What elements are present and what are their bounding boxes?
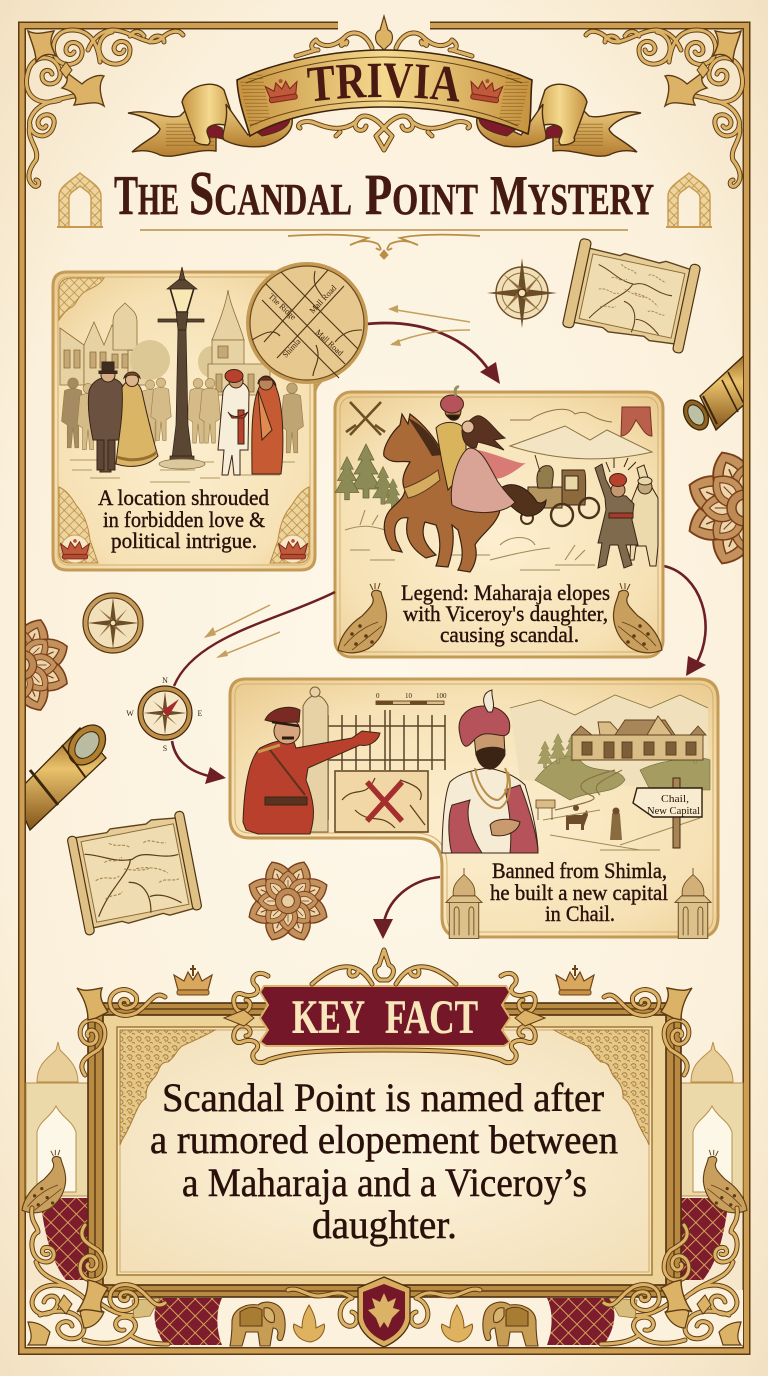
flow arrow 2 to 3 via compass: [172, 592, 335, 784]
band background: [26, 1290, 743, 1345]
filigree arch right: [554, 1030, 649, 1145]
top crest: [312, 950, 456, 984]
key fact text: Scandal Point is named after: [162, 1075, 604, 1120]
panel 2 background: [335, 392, 663, 657]
icon: left arch: [57, 173, 103, 227]
colonial buildings: [60, 303, 150, 385]
lotus left: [293, 1305, 325, 1342]
street map inset: Mall Road: [314, 327, 346, 358]
dome right: [675, 868, 711, 938]
icon: crown left: [61, 535, 89, 563]
filigree arch left: [120, 1030, 215, 1145]
panel 3 caption: Banned from Shimla,: [492, 858, 667, 883]
red-crossed map: [335, 771, 428, 832]
icon: right arch: [666, 173, 712, 227]
panel 1 caption: political intrigue.: [111, 528, 257, 553]
hands: [490, 819, 520, 836]
icon: crown right of key fact: [556, 965, 594, 995]
panel 2: the legend: [335, 387, 663, 657]
key fact banner: [224, 950, 545, 1063]
corner scroll bottom left: [77, 1225, 165, 1312]
title: [114, 160, 654, 228]
title: THE: [114, 165, 179, 227]
icon: right crown: [468, 77, 504, 103]
banner ribbon: TRIVIA: [128, 49, 642, 157]
icon: crown left of key fact: [174, 965, 212, 995]
plume: [484, 690, 494, 712]
key fact text: a Maharaja and a Viceroy’s: [182, 1160, 587, 1205]
pine trees: [335, 444, 401, 508]
telescope right: [682, 356, 743, 432]
panel 2 inner line: [340, 397, 658, 652]
face and beard: [474, 731, 505, 765]
banner scrolls: [224, 973, 545, 1063]
necklaces: [471, 768, 510, 808]
carriage: [521, 455, 599, 526]
ribbon end hatching: [240, 73, 529, 128]
iron gate: [303, 687, 445, 832]
panel edge curve toward street map: [315, 376, 330, 392]
flow arrow 3 to key fact: [373, 877, 440, 939]
panel 3 background: [230, 679, 718, 937]
panel 1 caption: [98, 485, 269, 553]
panel 2 caption: with Viceroy's daughter,: [403, 601, 608, 626]
scarf: [478, 450, 526, 479]
elephant left: [230, 1302, 285, 1346]
robe: [442, 768, 538, 853]
lotus right: [441, 1305, 473, 1342]
scale bar: [376, 692, 447, 704]
key fact text: [150, 1075, 618, 1247]
street map inset: Shimla: [280, 336, 303, 359]
signpost: [633, 778, 702, 848]
scale bar: 10: [405, 692, 412, 700]
title: MYSTERY: [490, 165, 654, 227]
turban: [459, 706, 510, 746]
compass with cardinal points: E: [198, 709, 203, 718]
shield emblem: [288, 1277, 480, 1347]
red lattice: [40, 1198, 90, 1280]
ornament: scroll under banner: [298, 116, 470, 150]
banner label: KEY: [292, 991, 365, 1044]
arcade: [26, 1083, 90, 1196]
ribbon left tail: [128, 84, 292, 156]
treasure map top right: [562, 238, 701, 354]
officer in red: [243, 707, 380, 834]
palace and peacock side scene: left: [22, 1042, 90, 1280]
compass with cardinal points: W: [126, 709, 134, 718]
lady: [116, 372, 158, 466]
ground dust and bushes: [345, 510, 595, 570]
banner plate: [260, 986, 510, 1046]
title divider ornament: [140, 230, 628, 259]
center mandala: [244, 857, 332, 945]
winding road: [555, 770, 622, 810]
horse and figure on road: [566, 805, 622, 840]
mane: [408, 418, 442, 456]
background crowd: [62, 378, 303, 453]
gentleman: [88, 362, 125, 472]
street map inset: The Ridge: [267, 291, 298, 322]
lattice corners: [59, 278, 309, 563]
ribbon inner lines: [246, 57, 522, 126]
field lines: [543, 810, 700, 850]
Maharaja portrait: [442, 690, 538, 853]
arcade: [679, 1083, 743, 1196]
ornament: top crest above banner: [296, 16, 472, 56]
forest and gardens: [535, 734, 710, 800]
Maharaja rider: [436, 387, 466, 490]
banner text: TRIVIA: [306, 63, 460, 102]
dome: [37, 1042, 78, 1082]
hills: [510, 695, 708, 790]
panel 2 caption: causing scandal.: [440, 622, 579, 647]
harness: [404, 470, 440, 498]
compass with cardinal points: S: [163, 744, 167, 753]
arch opening: [693, 1106, 732, 1192]
palace of Chail: [572, 716, 706, 760]
couple: gentleman and lady: [88, 362, 158, 472]
bottom decorative band: [26, 1208, 743, 1346]
signpost: New Capital: [647, 805, 700, 817]
corner scroll top left: [77, 988, 165, 1075]
compass with cardinal points: N: [162, 676, 168, 685]
key fact body: [117, 1027, 652, 1275]
panel 1 caption: A location shrouded: [98, 485, 269, 510]
panel 3 inner line: [235, 684, 713, 932]
horse tail: [498, 485, 546, 516]
palace and peacock side scene: right: [679, 1042, 747, 1280]
icon: right peacock: [613, 583, 662, 653]
street lamp: [158, 267, 205, 469]
panel 1 caption: in forbidden love &: [103, 507, 265, 532]
key fact panel: [77, 950, 692, 1347]
compass rose top right: [487, 258, 557, 328]
elephant right: [483, 1302, 538, 1346]
telescope left: [26, 724, 107, 832]
ribbon main band: [237, 50, 532, 136]
banner label: [292, 991, 478, 1044]
trees behind: [130, 340, 226, 380]
street map inset: [246, 262, 368, 384]
corner scroll top right: [604, 988, 692, 1075]
icon: red tent: [621, 407, 652, 436]
banner label: FACT: [385, 991, 478, 1044]
street map inset: Mall Road: [307, 282, 339, 315]
scale bar: 100: [436, 692, 447, 700]
compass with cardinal points: [126, 676, 203, 753]
horse: [384, 414, 501, 572]
small roadside hut: [536, 800, 555, 820]
right bottom scrolls: [601, 1208, 741, 1345]
panel 3 caption: he built a new capital: [490, 880, 668, 905]
scale bar: 0: [376, 692, 380, 700]
frame band line: [95, 1009, 674, 1291]
red lattice: [679, 1198, 729, 1280]
signpost: Chail,: [661, 793, 689, 805]
mountains: [510, 409, 652, 459]
red lattice left: [155, 1298, 222, 1345]
ribbon right tail: [477, 84, 641, 156]
angry men: [595, 458, 658, 568]
panel 3: banished to Chail: [230, 679, 718, 938]
small compass left: [83, 593, 143, 653]
treasure map left: [66, 811, 203, 935]
left mandala decoration: [26, 619, 68, 711]
man in white: [218, 370, 249, 475]
icon: crossed swords: [346, 402, 385, 435]
title: SCANDAL: [189, 160, 352, 228]
panel 3 caption: in Chail.: [545, 901, 615, 926]
woman in sari: [252, 376, 283, 474]
flow arrow 2 to 3: [664, 566, 706, 676]
panel 2 caption: [401, 580, 610, 647]
couple: Indian man and woman: [218, 370, 283, 475]
outer dark gold frame: [88, 1003, 681, 1297]
corner scroll bottom right: [604, 1225, 692, 1312]
icon: left peacock: [338, 583, 387, 653]
icon: left crown: [264, 77, 300, 103]
panel 1 inner line: [58, 277, 310, 565]
frame inner line: [120, 1030, 649, 1272]
panel 1 background: [53, 272, 315, 570]
icon: crown right: [279, 535, 307, 563]
red lattice right: [547, 1298, 614, 1345]
ornament: top right corner: [586, 30, 743, 186]
cobbled ground: [70, 460, 295, 482]
arch opening: [37, 1106, 76, 1192]
panel 2 caption: Legend: Maharaja elopes: [401, 580, 610, 605]
dome: [691, 1042, 733, 1082]
panel 3 caption: [490, 858, 668, 926]
panel 1: forbidden love: [53, 262, 368, 570]
flow arrow 1 to 2: [366, 305, 500, 384]
left bottom scrolls: [28, 1208, 168, 1345]
peacock: [703, 1150, 747, 1213]
title: POINT: [365, 162, 478, 227]
temple: [208, 290, 270, 395]
princess rider: [451, 416, 515, 513]
middle light gold frame: [103, 1015, 666, 1285]
key fact text: daughter.: [312, 1202, 457, 1247]
dome left: [446, 868, 482, 938]
key fact text: a rumored elopement between: [150, 1117, 618, 1162]
horse and riders: [384, 387, 546, 572]
right mandala decoration: [688, 452, 742, 564]
peacock: [22, 1150, 66, 1213]
ornament: top left corner: [26, 30, 183, 186]
